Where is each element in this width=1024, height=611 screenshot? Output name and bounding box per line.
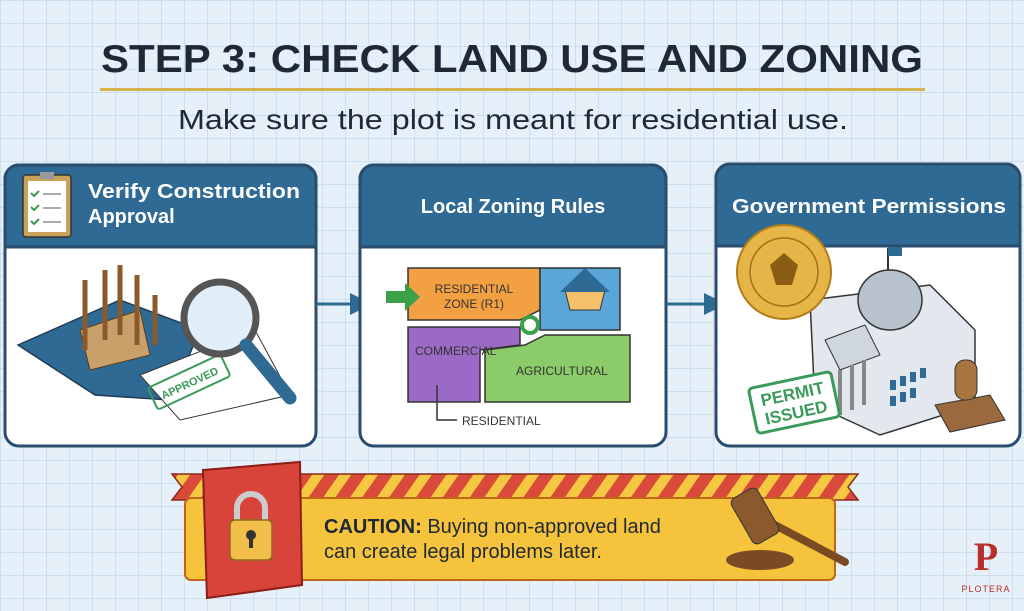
zoning map [386, 268, 630, 428]
logo [961, 534, 1011, 594]
illustration: blueprint, frame, magnifier [18, 265, 290, 420]
zoning map: COMMERCIAL [415, 344, 497, 358]
building illustration [810, 247, 975, 435]
icon: padlock [203, 462, 302, 598]
heading: Local Zoning Rules [421, 196, 605, 218]
zoning map: RESIDENTIAL [435, 282, 514, 296]
caution text: CAUTION: Buying non-approved land [324, 516, 661, 538]
zoning map: ZONE (R1) [444, 297, 504, 311]
stamp: permit issued: PERMIT [759, 378, 826, 410]
callout: caution banner: can create legal problems later. [324, 541, 602, 563]
panel: verify construction approval: Approval [88, 206, 175, 228]
title: STEP 3: CHECK LAND USE AND ZONING [101, 38, 923, 81]
heading: Government Permissions [732, 196, 1006, 218]
logo: PLOTERA [961, 584, 1011, 594]
stamp: permit issued [748, 371, 840, 434]
zoning map: AGRICULTURAL [516, 364, 608, 378]
callout: caution banner [172, 462, 858, 598]
panel: verify construction approval [5, 165, 316, 446]
stamp: permit issued: ISSUED [763, 397, 829, 429]
icon: gavel [726, 486, 845, 570]
subtitle: Make sure the plot is meant for residential use. [178, 104, 848, 135]
panel: government permissions [716, 164, 1020, 446]
icon: rubber stamp [935, 360, 1005, 432]
arrow [316, 293, 372, 315]
logo: P [974, 534, 998, 579]
arrow [666, 293, 726, 315]
icon: gold seal [737, 225, 831, 319]
zoning map: RESIDENTIAL [462, 414, 541, 428]
icon: clipboard [23, 172, 71, 237]
illustration: blueprint, frame, magnifier: APPROVED [159, 365, 221, 402]
panel: local zoning rules [360, 165, 666, 446]
heading: Verify Construction [88, 181, 300, 203]
